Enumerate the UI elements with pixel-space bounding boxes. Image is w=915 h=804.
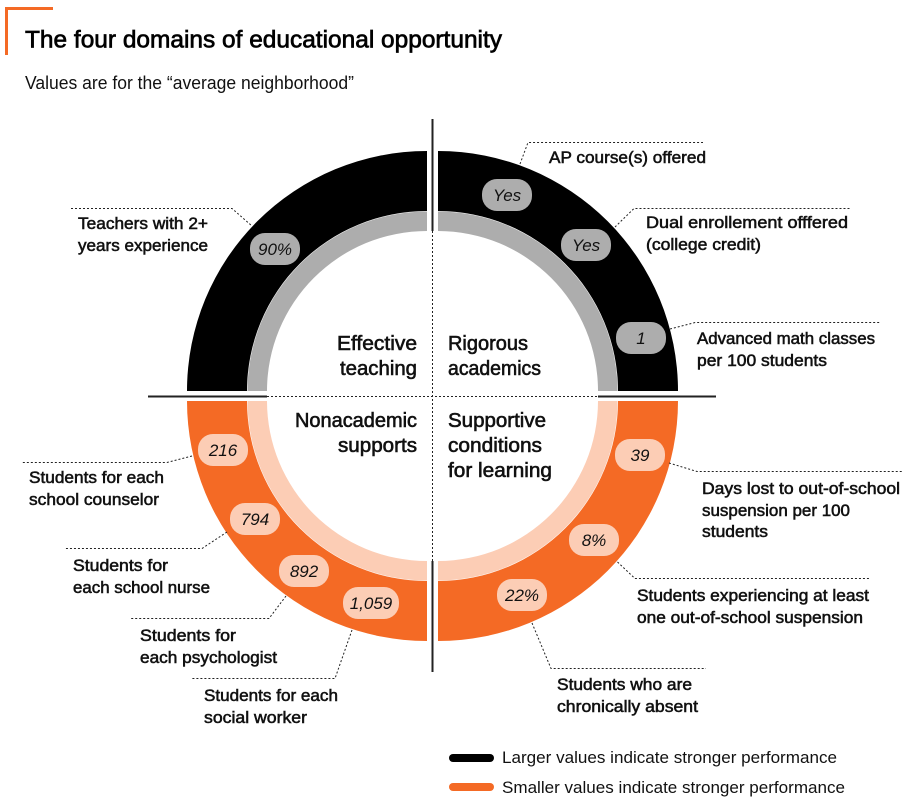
value pill: Yes (dual): Yes — [572, 236, 601, 255]
callout: teachers with experience: years experience — [78, 237, 208, 255]
heading: rigorous academics: academics — [448, 358, 541, 380]
heading: supportive conditions for learning: Supportive — [448, 410, 546, 432]
callout: out-of-school suspension — [618, 562, 870, 627]
value pill: Yes (AP): Yes — [493, 186, 522, 205]
callout: social worker: social worker — [204, 709, 308, 727]
heading: supportive conditions for learning — [448, 410, 552, 482]
value pill: 892 — [279, 555, 329, 587]
value pill: Yes (AP) — [482, 179, 532, 211]
value pill: 794 — [230, 503, 280, 535]
callout: school nurse — [65, 532, 227, 597]
title corner accent — [6, 8, 53, 55]
heading: effective teaching — [337, 333, 417, 380]
callout: advanced math: Advanced math classes — [697, 330, 875, 348]
callout: chronically absent — [532, 623, 706, 716]
heading: supportive conditions for learning: for learning — [448, 460, 552, 482]
legend: larger values: Larger values indicate stronger performance — [502, 748, 837, 767]
value pill: 1,059 — [343, 587, 399, 619]
title: The four domains of educational opportunity — [25, 26, 503, 54]
value pill: 39: 39 — [631, 446, 650, 465]
callout: school counselor — [22, 456, 192, 509]
value pill: 22% — [497, 579, 547, 611]
heading: supportive conditions for learning: conditions — [448, 435, 542, 457]
value pill: 1 — [616, 322, 666, 354]
callout: social worker: Students for each — [204, 687, 338, 705]
callout: days lost: Days lost to out-of-school — [702, 480, 900, 498]
callout: AP courses: AP course(s) offered — [549, 149, 706, 167]
value pill: 90%: 90% — [258, 240, 292, 259]
callout: days lost: suspension per 100 — [702, 502, 850, 520]
heading: nonacademic supports — [295, 410, 417, 457]
callout: psychologist: Students for — [140, 627, 237, 645]
value pill: 22%: 22% — [504, 586, 539, 605]
value pill: 892: 892 — [290, 562, 319, 581]
value pill: 39 — [615, 439, 665, 471]
value pill: 216 — [198, 434, 248, 466]
callout: dual enrollment: (college credit) — [646, 236, 761, 254]
panel: effective teaching quadrant — [187, 151, 427, 391]
panel: rigorous academics quadrant — [438, 151, 678, 391]
callout: social worker — [192, 630, 352, 727]
value pill: 216: 216 — [208, 441, 238, 460]
panel: supportive conditions quadrant — [438, 401, 678, 641]
callout: AP courses — [520, 142, 706, 167]
heading: effective teaching: Effective — [337, 333, 417, 355]
legend: smaller values: Smaller values indicate stronger performance — [502, 778, 845, 797]
value pill: 8%: 8% — [582, 531, 606, 550]
callout: chronically absent: chronically absent — [557, 698, 698, 716]
callout: advanced math: per 100 students — [697, 352, 827, 370]
callout: school nurse: Students for — [73, 557, 169, 575]
callout: psychologist: each psychologist — [140, 649, 277, 667]
heading: nonacademic supports: supports — [338, 435, 417, 457]
callout: advanced math — [670, 322, 880, 370]
value pill: Yes (dual) — [561, 229, 611, 261]
value pill: 794: 794 — [241, 510, 269, 529]
callout: out-of-school suspension: Students experiencing at least — [637, 587, 869, 605]
value pill: 8% — [569, 524, 619, 556]
heading: nonacademic supports: Nonacademic — [295, 410, 417, 432]
heading: rigorous academics: Rigorous — [448, 333, 528, 355]
subtitle: Values are for the “average neighborhood” — [25, 73, 354, 93]
panel: nonacademic supports quadrant — [187, 401, 427, 641]
callout: days lost: students — [702, 523, 768, 541]
callout: teachers with experience: Teachers with 2+ — [78, 215, 208, 233]
vertical axis — [432, 119, 434, 672]
callout: school counselor: Students for each — [29, 469, 164, 487]
value pill: 90% — [250, 233, 300, 265]
callout: out-of-school suspension: one out-of-school suspension — [637, 609, 863, 627]
value pill: 1: 1 — [636, 329, 646, 348]
callout: school nurse: each school nurse — [73, 579, 210, 597]
callout: school counselor: school counselor — [29, 491, 160, 509]
heading: effective teaching: teaching — [340, 358, 417, 380]
callout: psychologist — [131, 596, 286, 667]
callout: days lost — [669, 463, 902, 541]
callout: teachers with experience — [71, 208, 252, 255]
callout: dual enrollment: Dual enrollement offfered — [646, 214, 848, 232]
heading: rigorous academics — [448, 333, 541, 380]
horizontal axis — [148, 396, 716, 398]
callout: chronically absent: Students who are — [557, 676, 692, 694]
callout: dual enrollment — [615, 208, 850, 254]
value pill: 1,059: 1,059 — [350, 594, 393, 613]
